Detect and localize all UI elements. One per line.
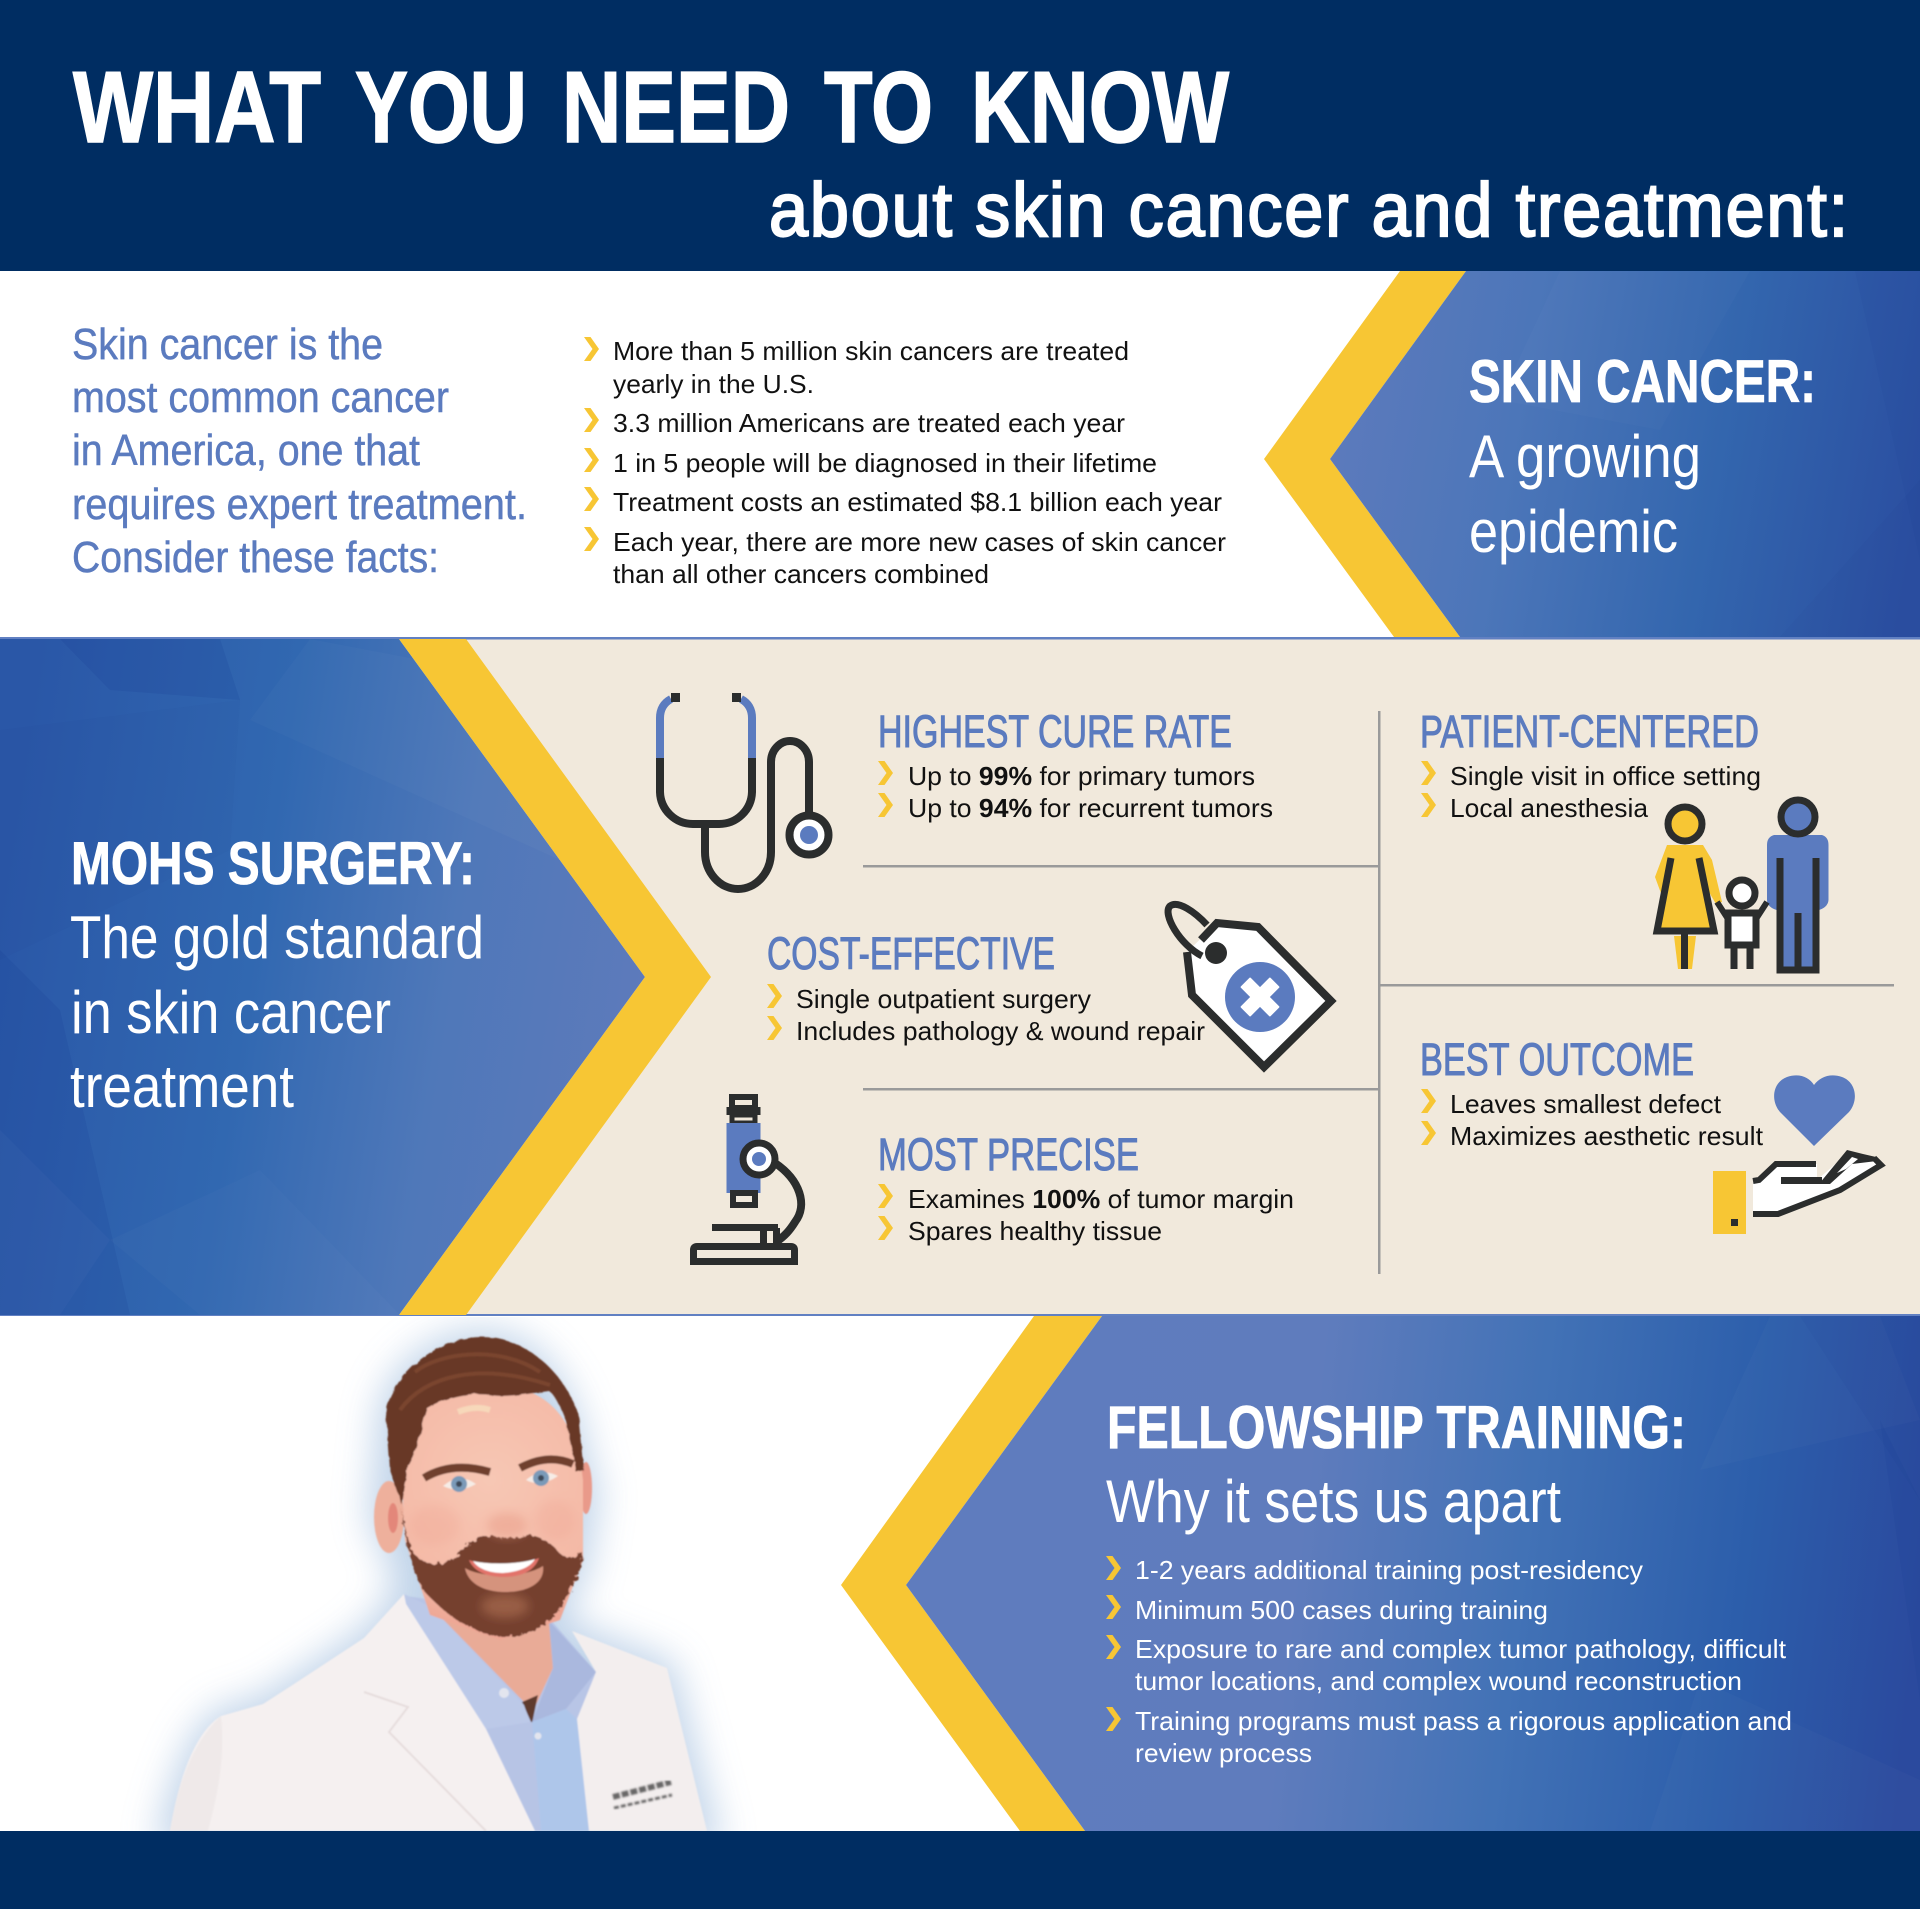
icon: price tag (1168, 904, 1331, 1067)
panel: fellowship training (0, 1316, 1920, 1840)
patient-centered: Local anesthesia (1450, 793, 1649, 823)
training list: Minimum 500 cases during training (1135, 1595, 1548, 1625)
subheading: A growing (1469, 423, 1701, 490)
patient-centered: PATIENT-CENTERED (1420, 706, 1759, 757)
highest cure rate (878, 706, 1273, 823)
doctor figure (170, 1337, 707, 1831)
intro paragraph: Consider these facts: (72, 533, 439, 582)
fact list: Treatment costs an estimated $8.1 billion each year (613, 487, 1222, 517)
title line one: TO (824, 52, 933, 164)
fact list: Each year, there are more new cases of skin cancer (613, 527, 1226, 557)
photo: doctor portrait (165, 1337, 712, 1840)
training list: 1-2 years additional training post-residency (1135, 1555, 1643, 1585)
subheading (1469, 423, 1701, 565)
most precise: MOST PRECISE (878, 1129, 1139, 1180)
blue heading block (1330, 271, 1920, 637)
cost-effective: Includes pathology & wound repair (796, 1016, 1205, 1046)
intro paragraph: in America, one that (72, 426, 420, 475)
subheading: epidemic (1469, 498, 1678, 565)
intro paragraph: most common cancer (72, 373, 449, 422)
cost-effective: COST-EFFECTIVE (767, 928, 1055, 979)
training list: review process (1135, 1738, 1312, 1768)
header banner (0, 0, 1920, 271)
training list: Training programs must pass a rigorous application and (1135, 1706, 1792, 1736)
yellow chevron (841, 1316, 1102, 1831)
fact list: 3.3 million Americans are treated each year (613, 408, 1125, 438)
patient-centered: Single visit in office setting (1450, 761, 1761, 791)
title line one: NEED (562, 52, 790, 164)
heading: MOHS SURGERY: (71, 830, 475, 897)
title line one: WHAT (73, 52, 321, 164)
most precise: Examines 100% of tumor margin (908, 1184, 1294, 1214)
coat embroidery (613, 1782, 672, 1808)
fact list: More than 5 million skin cancers are treated (613, 336, 1129, 366)
icon: microscope (694, 1097, 801, 1262)
subheading: Why it sets us apart (1106, 1468, 1561, 1535)
subheading: The gold standard (70, 904, 484, 971)
most precise (878, 1129, 1294, 1246)
best outcome (1420, 1034, 1764, 1151)
subheading: treatment (70, 1053, 294, 1120)
intro paragraph: requires expert treatment. (72, 480, 527, 529)
blue text block (906, 1316, 1920, 1831)
patient-centered (1420, 706, 1761, 823)
panel: skin cancer facts (0, 271, 1920, 637)
title line two: about skin cancer and treatment: (769, 168, 1850, 253)
subheading (70, 904, 484, 1120)
heading: SKIN CANCER: (1469, 348, 1816, 415)
icon: stethoscope (660, 693, 828, 889)
training list: tumor locations, and complex wound reconstruction (1135, 1666, 1742, 1696)
title line one: YOU (355, 52, 527, 164)
highest cure rate: Up to 99% for primary tumors (908, 761, 1255, 791)
fact list: than all other cancers combined (613, 559, 989, 589)
fact list: yearly in the U.S. (613, 369, 814, 399)
icon: family (1654, 800, 1828, 970)
intro paragraph: Skin cancer is the (72, 320, 383, 369)
best outcome: Leaves smallest defect (1450, 1089, 1722, 1119)
blue arrow block (0, 639, 645, 1315)
title line one (73, 52, 1230, 164)
training list: Exposure to rare and complex tumor pathology, difficult (1135, 1634, 1787, 1664)
subheading: in skin cancer (71, 979, 391, 1046)
highest cure rate: HIGHEST CURE RATE (878, 706, 1232, 757)
footer band (0, 1831, 1920, 1909)
best outcome: Maximizes aesthetic result (1450, 1121, 1764, 1151)
fact list (584, 336, 1226, 589)
cost-effective: Single outpatient surgery (796, 984, 1091, 1014)
best outcome: BEST OUTCOME (1420, 1034, 1694, 1085)
highest cure rate: Up to 94% for recurrent tumors (908, 793, 1273, 823)
fact list: 1 in 5 people will be diagnosed in their lifetime (613, 448, 1157, 478)
yellow chevron (1264, 271, 1466, 637)
photo glow (165, 1337, 712, 1840)
most precise: Spares healthy tissue (908, 1216, 1162, 1246)
heading: FELLOWSHIP TRAINING: (1107, 1394, 1686, 1461)
intro paragraph (72, 320, 527, 582)
title line one: KNOW (971, 52, 1230, 164)
yellow chevron (399, 639, 711, 1315)
cost-effective (767, 928, 1205, 1046)
panel: mohs surgery (0, 637, 1920, 1316)
divider lines (863, 711, 1894, 1274)
icon: heart in hand (1713, 1075, 1881, 1234)
training list (1106, 1555, 1792, 1768)
